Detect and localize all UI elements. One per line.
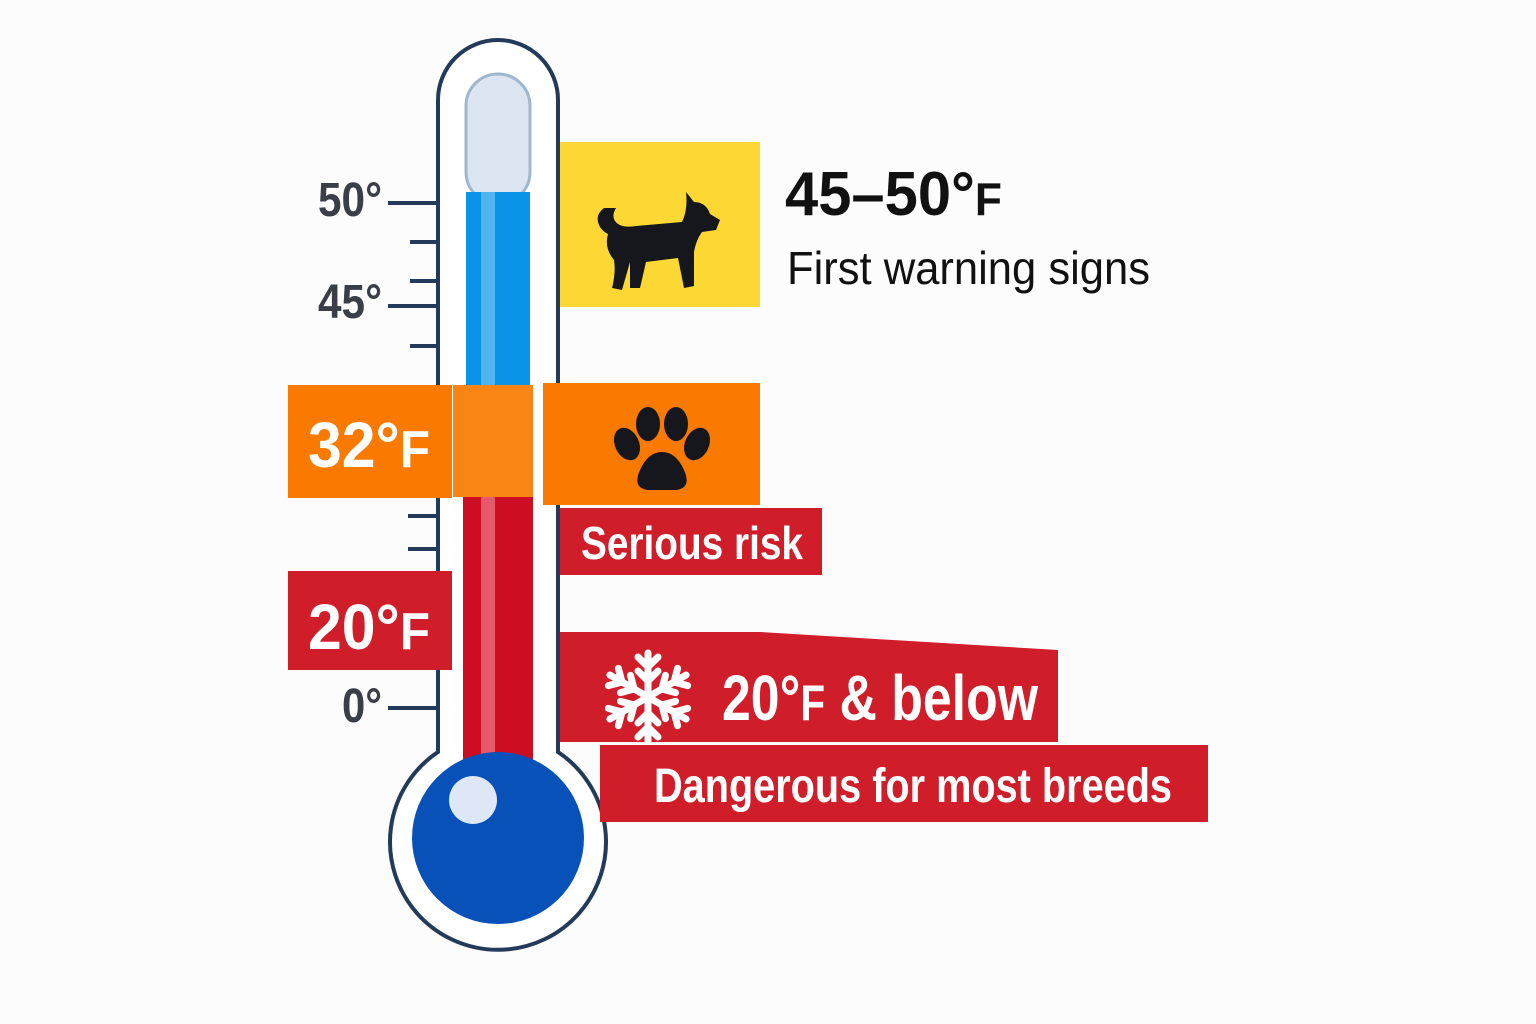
thermometer <box>390 40 606 950</box>
scale labels: 0° <box>342 680 382 733</box>
panel: 20F label <box>288 571 452 670</box>
panel: paw (orange) <box>543 383 760 505</box>
icon: snowflake <box>605 653 691 741</box>
panel: 20F & below <box>560 632 1058 742</box>
scale ticks <box>388 203 436 708</box>
heading: 45–50°F: 45–50°F <box>785 160 1002 229</box>
scale labels <box>318 174 382 733</box>
panel: dangerous <box>600 745 1208 822</box>
scale labels: 45° <box>318 276 382 329</box>
scale labels: 50° <box>318 174 382 227</box>
panel: 20F & below: 20°F & below <box>722 662 1038 734</box>
icon: dog <box>598 192 720 290</box>
text: first warning signs: First warning signs <box>787 242 1150 294</box>
panel: first warning (yellow) <box>560 142 760 307</box>
panel: 32F label <box>288 385 452 498</box>
panel: serious risk: Serious risk <box>581 517 803 569</box>
tube orange band <box>453 385 533 497</box>
panel: 32F label: 32°F <box>308 409 430 481</box>
panel: serious risk <box>560 508 822 575</box>
icon: paw <box>609 407 715 490</box>
panel: 20F label: 20°F <box>308 591 430 663</box>
panel: dangerous: Dangerous for most breeds <box>654 760 1172 813</box>
